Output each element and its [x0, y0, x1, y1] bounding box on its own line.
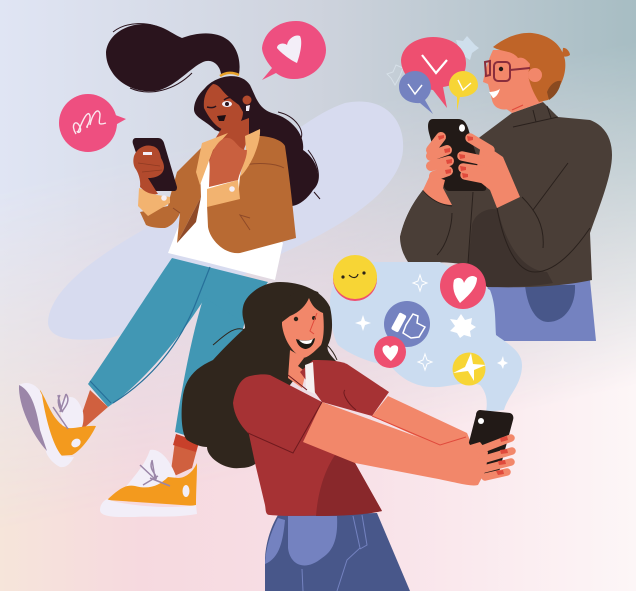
sneaker: back foot — [19, 383, 96, 467]
hair tie — [220, 73, 239, 76]
jeans seams — [302, 515, 367, 591]
face — [204, 84, 252, 131]
hair tuft — [562, 48, 570, 57]
man's speech bubbles — [387, 36, 479, 114]
face — [282, 290, 324, 358]
jeans: front leg — [88, 258, 268, 407]
right hand — [459, 136, 520, 208]
shirt shading — [316, 455, 382, 516]
sweater lines — [423, 106, 590, 272]
hair — [493, 33, 565, 102]
small heart circle — [374, 336, 406, 368]
ponytail — [106, 24, 240, 91]
sparkles — [355, 315, 508, 369]
sideburn shadow — [547, 81, 561, 100]
ear — [528, 68, 542, 82]
jeans pockets — [265, 516, 337, 565]
eye and mouth — [489, 67, 523, 110]
sneaker: front foot — [100, 450, 197, 517]
hair — [182, 282, 337, 468]
reaction icons — [333, 255, 508, 386]
holding hand — [133, 145, 164, 194]
near arm and hand — [303, 402, 512, 485]
pale blue cloud of reactions — [330, 262, 522, 412]
speech bubble: heart — [262, 21, 326, 80]
hair strands — [278, 112, 320, 199]
blue bubble — [399, 71, 433, 114]
sleeve lines — [248, 375, 356, 453]
pale star — [455, 36, 479, 60]
yellow bubble — [449, 71, 478, 111]
phone — [468, 410, 513, 478]
hand on chest — [209, 138, 247, 187]
back leg and ankle — [170, 296, 250, 478]
jeans — [265, 513, 410, 591]
white strap — [305, 362, 315, 394]
jeans seams — [90, 267, 210, 403]
smiley — [333, 255, 377, 301]
speech bubble: scribble — [59, 94, 126, 152]
long hair — [194, 76, 318, 206]
cuffs — [138, 180, 240, 216]
heart circle — [440, 263, 486, 309]
phone — [428, 119, 486, 191]
phone — [133, 138, 177, 191]
figure: woman with ponytail — [19, 24, 320, 517]
white top — [168, 150, 283, 280]
lavender blob — [48, 101, 403, 340]
jeans pocket — [525, 285, 575, 322]
glasses — [485, 61, 530, 81]
white burst — [450, 314, 476, 338]
back shoulder of top — [300, 360, 389, 416]
hair strand — [213, 329, 337, 360]
thumbs up — [384, 301, 430, 347]
jeans — [487, 280, 596, 341]
torso — [248, 402, 382, 516]
outline star — [387, 65, 403, 85]
sweater shading — [468, 209, 553, 287]
lapels — [196, 129, 260, 185]
neck — [505, 85, 543, 113]
figure: woman taking selfie — [182, 282, 513, 591]
neck — [288, 350, 306, 388]
jacket — [138, 129, 296, 253]
sweater body — [400, 102, 612, 287]
red bubble — [401, 37, 466, 108]
ponytail strands — [113, 24, 192, 92]
face — [483, 50, 540, 109]
ankle — [78, 390, 108, 428]
star circle — [452, 352, 486, 386]
heart — [277, 35, 301, 63]
left hand — [423, 135, 452, 205]
near sleeve — [233, 374, 322, 453]
neck and chest — [208, 118, 249, 186]
left sleeve — [400, 190, 473, 268]
figure: man with glasses — [400, 33, 612, 341]
far arm — [372, 396, 472, 447]
